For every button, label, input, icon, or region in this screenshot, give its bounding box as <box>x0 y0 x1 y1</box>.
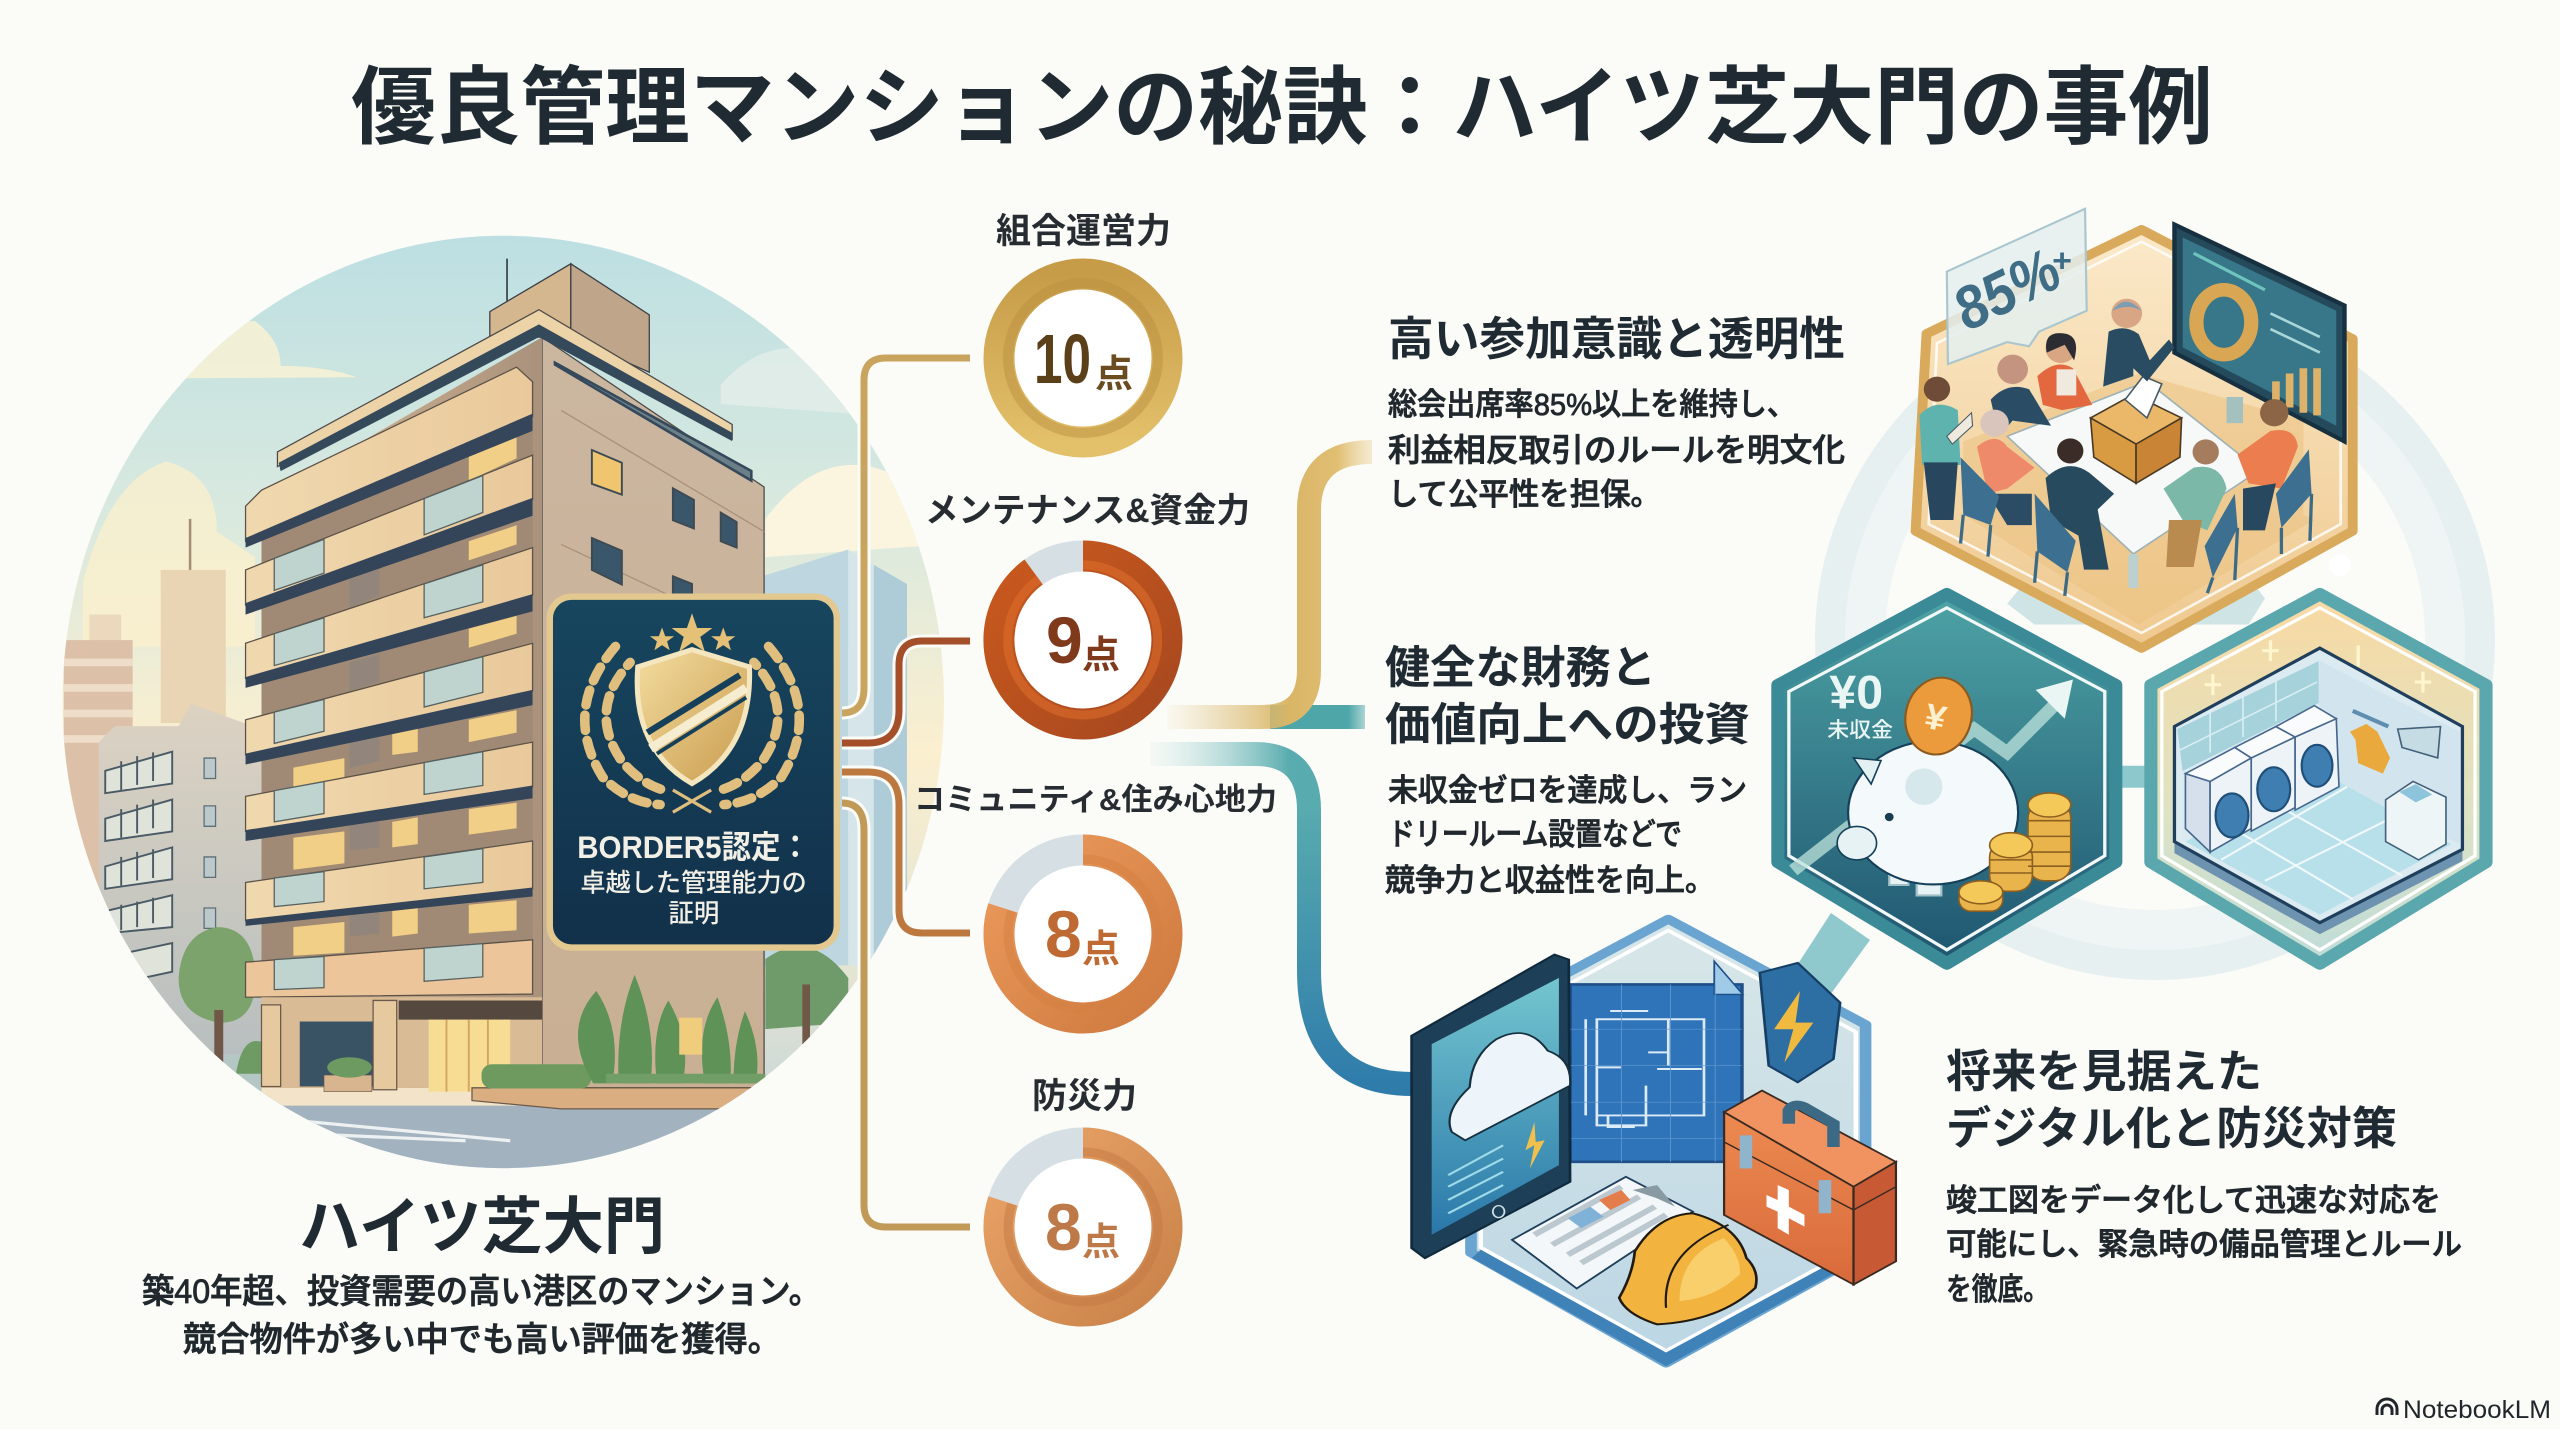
score: 組合運営力 10点: 組合運営力 <box>996 212 1171 251</box>
score: メンテナンス&資金力 9点: メンテナンス&資金力 <box>925 492 1250 530</box>
building description <box>142 1273 821 1359</box>
rising arrow <box>1793 703 2057 870</box>
building description: 築40年超、投資需要の高い港区のマンション。 <box>142 1273 821 1311</box>
hexagon: piggy bank <box>1778 594 2116 963</box>
score: 組合運営力 10点: 点 <box>1095 354 1133 396</box>
roof slab <box>277 310 732 467</box>
recess windows <box>293 436 517 956</box>
hard hat <box>1619 1213 1756 1324</box>
link bar between hexagons <box>1794 913 1870 995</box>
speech bubble 85%: + <box>2052 243 2072 279</box>
icon: NotebookLM logo <box>2377 1399 2397 1415</box>
balcony partitions <box>350 569 379 937</box>
hexagon: laundry room <box>2151 594 2486 963</box>
ballot box <box>2091 394 2182 444</box>
strategy: 健全な財務と価値向上への投資 <box>1385 642 1750 898</box>
strategy: 将来を見据えたデジタル化と防災対策: を徹底。 <box>1946 1272 2049 1307</box>
coin stacks <box>1959 793 2071 911</box>
standing person <box>1919 405 1961 465</box>
score: 防災力 8点 <box>999 1077 1167 1311</box>
strategy: 健全な財務と価値向上への投資: 競争力と収益性を向上。 <box>1385 863 1715 898</box>
documents <box>1512 1177 1693 1289</box>
presenter <box>2103 328 2174 387</box>
coin: ¥ <box>1921 696 1951 739</box>
side windows <box>592 450 622 495</box>
background ring behind hexagons <box>1830 315 2480 965</box>
blueprint <box>1570 961 1743 1162</box>
icon: lightning shield <box>1760 963 1840 1082</box>
person coral <box>1977 439 2035 494</box>
person green <box>2163 467 2227 530</box>
building description: 競合物件が多い中でも高い評価を獲得。 <box>183 1321 781 1359</box>
title: 優良管理マンションの秘訣：ハイツ芝大門の事例 <box>351 61 2213 156</box>
illustration: digital and disaster prevention <box>1412 919 1896 1366</box>
ground floor <box>261 997 542 1088</box>
connectors from scores to strategies <box>1150 452 1412 1084</box>
icon: laurel wreath <box>585 646 799 805</box>
front body <box>261 337 542 1088</box>
score: コミュニティ&住み心地力 8点 <box>914 782 1277 1018</box>
monitor <box>2174 224 2344 442</box>
room <box>2174 842 2462 934</box>
piggy body <box>1889 860 1941 895</box>
illustration group: hexagons <box>1778 209 2486 963</box>
score: 防災力 8点: 点 <box>1082 1222 1120 1264</box>
icon: shield <box>637 650 750 784</box>
score: コミュニティ&住み心地力 8点: 点 <box>1082 929 1120 971</box>
road <box>264 1093 742 1168</box>
strategy: 将来を見据えたデジタル化と防災対策 <box>1946 1046 2462 1307</box>
strategy: 健全な財務と価値向上への投資: 未収金ゼロを達成し、ラン <box>1388 773 1747 808</box>
balconies <box>246 367 533 541</box>
trees <box>179 927 255 1023</box>
strategy: 健全な財務と価値向上への投資: 価値向上への投資 <box>1385 699 1750 750</box>
badge text: BORDER5認定： <box>577 829 810 865</box>
score: 防災力 8点: 防災力 <box>1032 1077 1137 1116</box>
strategy: 将来を見据えたデジタル化と防災対策: 将来を見据えた <box>1946 1046 2262 1097</box>
score: 組合運営力 10点: 10 <box>1034 320 1091 398</box>
score: メンテナンス&資金力 9点: 点 <box>1082 635 1120 677</box>
recesses between balconies <box>261 426 533 961</box>
badge text <box>577 829 810 928</box>
chairs <box>1961 449 2312 577</box>
speech bubble 85%: 85% <box>1942 237 2072 344</box>
strategy: 将来を見据えたデジタル化と防災対策: 竣工図をデータ化して迅速な対応を <box>1946 1183 2441 1218</box>
icon: three stars <box>650 613 735 652</box>
side wall <box>542 337 764 1088</box>
first-aid box <box>1724 1091 1896 1285</box>
NotebookLM watermark: NotebookLM <box>2403 1396 2551 1424</box>
¥0 text <box>1827 667 1893 742</box>
strategy: 高い参加意識と透明性: して公平性を担保。 <box>1388 477 1661 512</box>
speech bubble 85% <box>1942 209 2087 364</box>
hexagon base <box>1471 919 1866 1363</box>
strategy: 将来を見据えたデジタル化と防災対策: 可能にし、緊急時の備品管理とルール <box>1946 1227 2462 1262</box>
strategy: 高い参加意識と透明性: 高い参加意識と透明性 <box>1388 313 1845 365</box>
¥0 text: ¥0 <box>1829 667 1883 719</box>
strategy: 高い参加意識と透明性 <box>1388 313 1845 512</box>
coin <box>1898 672 1979 760</box>
sparkles <box>2205 640 2431 695</box>
strategy: 高い参加意識と透明性: 利益相反取引のルールを明文化 <box>1388 432 1845 468</box>
connectors from badge to scores <box>842 358 970 1227</box>
washers <box>2185 706 2339 852</box>
strategy: 将来を見据えたデジタル化と防災対策: デジタル化と防災対策 <box>1946 1103 2397 1154</box>
score: メンテナンス&資金力 9点 <box>925 492 1250 724</box>
tablet <box>1412 955 1570 1258</box>
building illustration <box>57 232 950 1176</box>
right blue buildings <box>762 550 848 965</box>
strategy: 健全な財務と価値向上への投資: ドリールーム設置などで <box>1388 817 1682 852</box>
score: コミュニティ&住み心地力 8点: 8 <box>1045 897 1082 971</box>
distant towers <box>161 570 226 723</box>
person orange <box>2238 430 2298 489</box>
badge text: 卓越した管理能力の <box>580 869 807 897</box>
rooftop box <box>490 264 571 337</box>
score: メンテナンス&資金力 9点: 9 <box>1046 603 1083 677</box>
¥0 text: 未収金 <box>1827 718 1893 742</box>
score: 組合運営力 10点 <box>996 212 1171 442</box>
shirt and fixtures <box>2353 711 2388 727</box>
table <box>2007 381 2259 554</box>
person dark center <box>2046 466 2114 570</box>
balcony glass <box>274 476 483 990</box>
link bars <box>2007 577 2265 625</box>
hexagon: meeting <box>1916 209 2353 648</box>
score: 防災力 8点: 8 <box>1045 1190 1082 1264</box>
near left building <box>99 704 261 1055</box>
seated people <box>1991 387 2051 436</box>
badge text: 証明 <box>668 900 719 928</box>
building name: ハイツ芝大門 <box>299 1193 665 1262</box>
score: コミュニティ&住み心地力 8点: コミュニティ&住み心地力 <box>914 782 1277 817</box>
strategy: 健全な財務と価値向上への投資: 健全な財務と <box>1385 642 1656 693</box>
certification badge <box>550 597 837 948</box>
strategy: 高い参加意識と透明性: 総会出席率85%以上を維持し、 <box>1388 387 1796 422</box>
